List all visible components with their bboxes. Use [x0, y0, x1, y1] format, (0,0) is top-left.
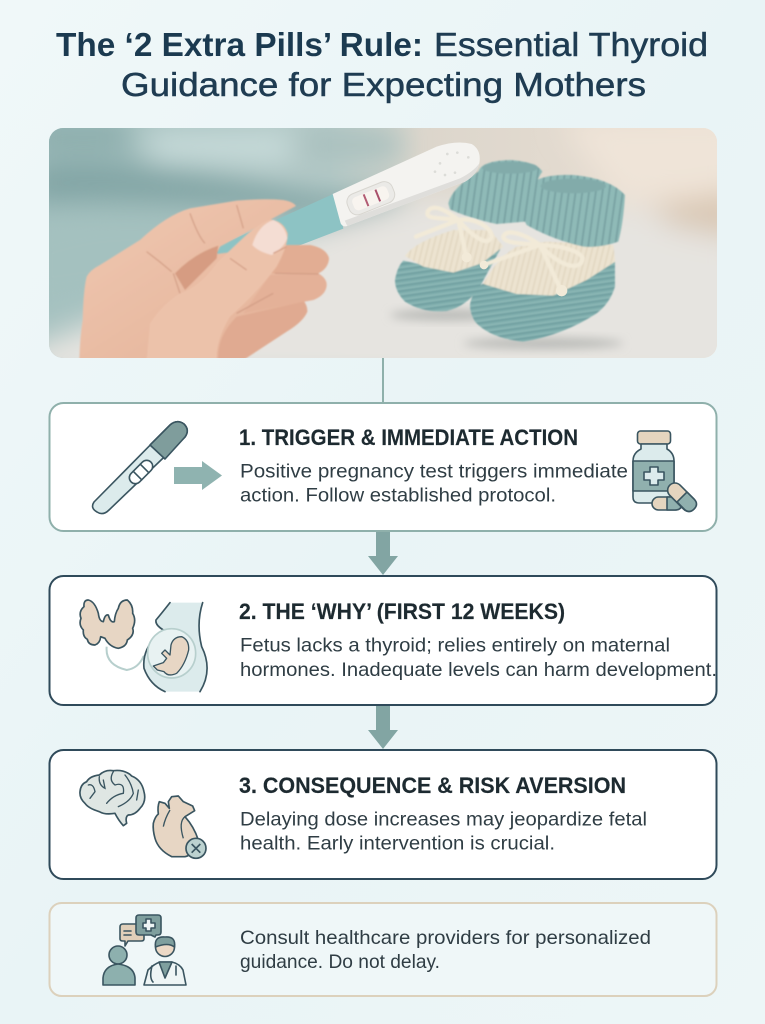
body text	[240, 460, 628, 506]
body text: action. Follow established protocol.	[240, 484, 556, 506]
hero photo: hand holding pregnancy test beside knitted baby booties	[49, 128, 717, 358]
heading: 2. THE ‘WHY’ (FIRST 12 WEEKS)	[239, 599, 565, 624]
panel 2: why first 12 weeks	[50, 576, 717, 705]
panel 1: trigger and immediate action	[50, 403, 716, 531]
heading: 3. CONSEQUENCE & RISK AVERSION	[239, 773, 626, 798]
icon: pregnancy test	[93, 422, 187, 514]
icon: heart with warning mark	[153, 796, 206, 858]
heading: 1. TRIGGER & IMMEDIATE ACTION	[239, 425, 578, 450]
body text: guidance. Do not delay.	[240, 951, 440, 973]
arrow: step 2 to step 3	[368, 706, 398, 749]
title	[56, 26, 708, 103]
arrow: step 1 to step 2	[368, 532, 398, 575]
body text	[240, 634, 717, 681]
icon: thyroid and fetus	[80, 600, 207, 692]
connector line	[382, 358, 384, 403]
title: Essential Thyroid	[434, 26, 708, 63]
bootie ties	[416, 208, 583, 292]
icon: brain	[80, 770, 145, 826]
title: The ‘2 Extra Pills’ Rule:	[56, 26, 423, 63]
body text: hormones. Inadequate levels can harm development.	[240, 659, 717, 681]
icon: medicine bottle with capsules	[633, 431, 699, 514]
photo: blurred blanket and fabric background	[49, 128, 717, 358]
body text: Consult healthcare providers for personalized	[240, 927, 651, 949]
panel 4: consult healthcare providers	[50, 903, 716, 996]
body text	[240, 808, 647, 854]
body text: Positive pregnancy test triggers immediate	[240, 460, 628, 482]
photo: hand	[79, 199, 329, 360]
title: Guidance for Expecting Mothers	[121, 66, 646, 103]
front bootie	[470, 262, 615, 342]
body text: Fetus lacks a thyroid; relies entirely on maternal	[240, 634, 670, 656]
icon: arrow right	[174, 461, 222, 490]
body text: health. Early intervention is crucial.	[240, 832, 555, 854]
photo: rear and front booties	[390, 160, 625, 349]
panel 3: consequence and risk aversion	[50, 750, 716, 879]
body text: Delaying dose increases may jeopardize fetal	[240, 808, 647, 830]
rear bootie	[395, 247, 502, 311]
photo: pregnancy test stick	[217, 142, 480, 262]
body text	[240, 927, 651, 973]
icon: patient and doctor consultation	[103, 915, 186, 985]
